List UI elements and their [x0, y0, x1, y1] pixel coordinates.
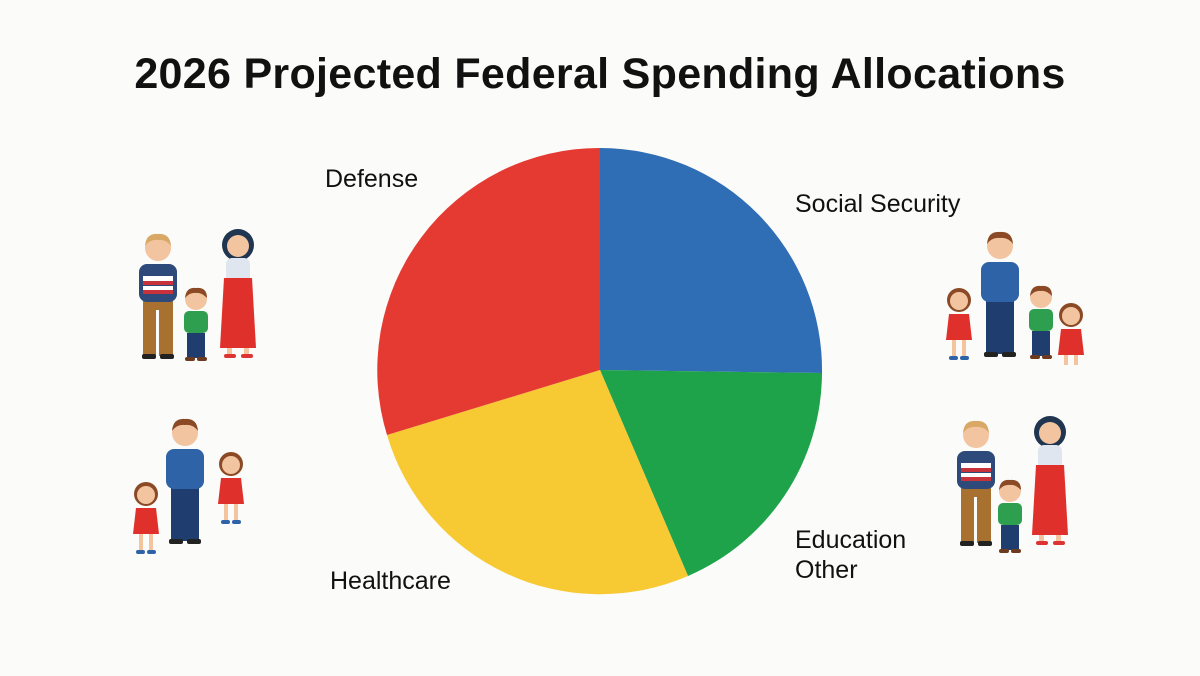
label: Education Other: Education	[795, 526, 906, 554]
label: Education Other: Other	[795, 556, 858, 584]
family: bottom left	[133, 418, 244, 554]
family: top right	[946, 232, 1084, 365]
label: Defense: Defense	[325, 165, 418, 193]
label: Education Other	[795, 526, 906, 584]
family: top left	[139, 229, 256, 361]
title: 2026 Projected Federal Spending Allocations	[134, 50, 1066, 98]
label: Healthcare: Healthcare	[330, 567, 451, 595]
family: bottom right	[957, 416, 1068, 553]
label: Social Security: Social Security	[795, 190, 960, 218]
